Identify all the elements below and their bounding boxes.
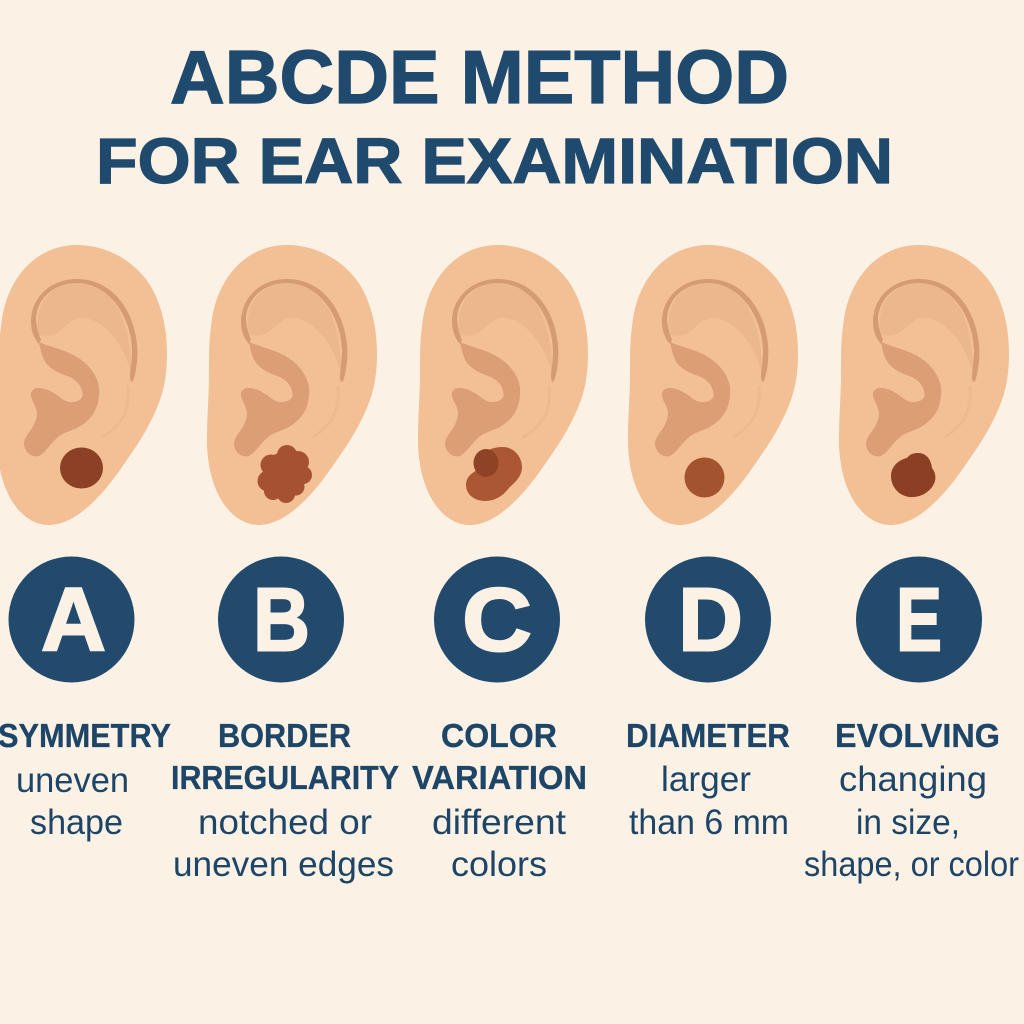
label: color variation: VARIATION <box>412 759 587 796</box>
label: evolving: EVOLVING <box>835 717 1000 754</box>
title: FOR EAR EXAMINATION <box>96 125 893 197</box>
title: ABCDE METHOD <box>170 35 789 119</box>
label: evolving: changing <box>839 760 987 799</box>
label: asymmetry: SYMMETRY <box>0 717 171 754</box>
badge D <box>645 556 771 682</box>
ear with lobed dark mole <box>839 245 1009 525</box>
title <box>96 35 893 197</box>
badge E: E <box>896 570 942 670</box>
label: border irregularity: uneven edges <box>173 845 394 884</box>
label: asymmetry: shape <box>30 803 123 842</box>
label: border irregularity: BORDER <box>218 717 351 754</box>
label: diameter: DIAMETER <box>626 717 790 754</box>
label: border irregularity <box>171 717 399 884</box>
ear with scalloped mole <box>207 245 377 525</box>
label: evolving: in size, <box>856 803 960 842</box>
panel: asymmetry <box>0 245 171 842</box>
ear with round dark mole <box>0 245 167 525</box>
label: color variation <box>412 717 587 884</box>
label: asymmetry: uneven <box>16 761 129 800</box>
badge D: D <box>678 570 743 670</box>
label: diameter <box>626 717 790 842</box>
label: border irregularity: IRREGULARITY <box>171 759 399 796</box>
label: diameter: larger <box>661 760 751 799</box>
label: border irregularity: notched or <box>198 803 372 842</box>
badge B <box>218 556 344 682</box>
label: color variation: different <box>432 803 566 842</box>
badge C: C <box>462 570 532 670</box>
label: color variation: COLOR <box>441 717 557 754</box>
badge B: B <box>253 570 310 670</box>
panel: color variation <box>412 245 588 884</box>
label: asymmetry <box>0 717 171 842</box>
panel: evolving <box>804 245 1019 884</box>
panel: diameter <box>626 245 798 842</box>
badge A: A <box>41 570 106 670</box>
label: color variation: colors <box>451 845 547 884</box>
label: diameter: than 6 mm <box>629 803 789 842</box>
ear with two-tone mole <box>418 245 588 525</box>
badge C <box>434 556 560 682</box>
label: evolving <box>804 717 1019 884</box>
badge E <box>856 556 982 682</box>
ear with mid-brown round mole <box>628 245 798 525</box>
badge A <box>8 556 134 682</box>
panel: border irregularity <box>171 245 399 884</box>
